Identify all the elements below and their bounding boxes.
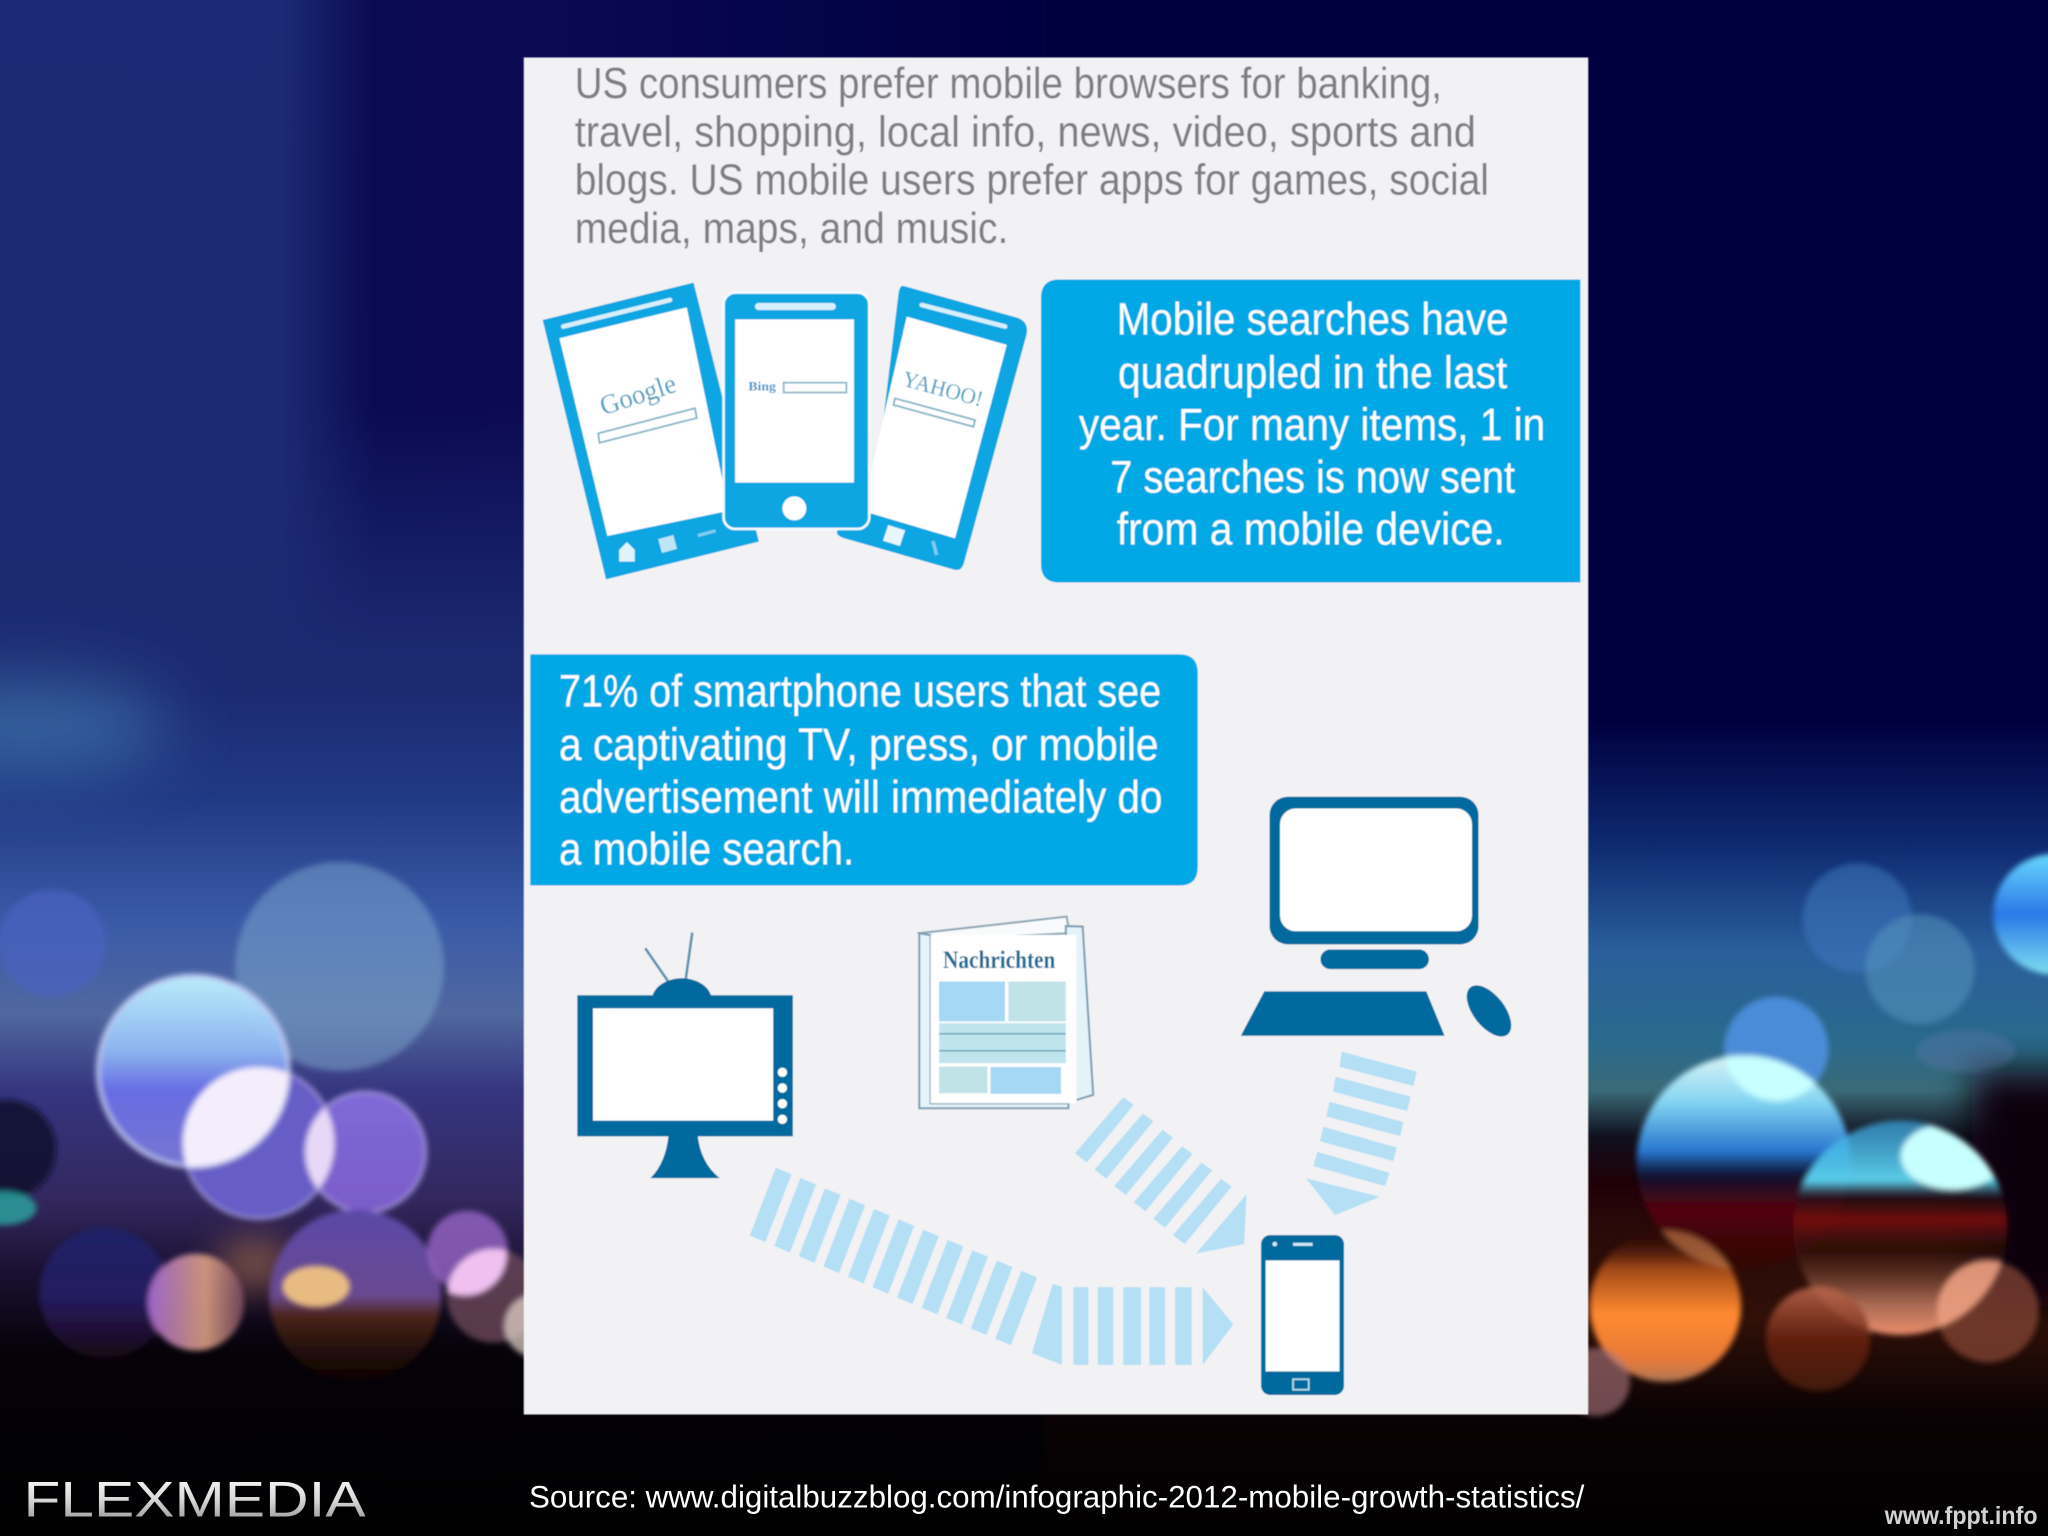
intro text: blogs. US mobile users prefer apps for games, social	[575, 157, 1489, 205]
callout: mobile searches: Mobile searches have	[1117, 293, 1509, 344]
bokeh: left cluster	[0, 862, 567, 1382]
icon: book	[658, 535, 677, 553]
icon: house	[619, 542, 635, 562]
callout: mobile searches: from a mobile device.	[1117, 504, 1505, 555]
callout: 71% of smartphone users: a mobile search.	[559, 824, 854, 875]
icon: left phone with Google: Google	[596, 368, 680, 421]
icon: television	[577, 933, 793, 1178]
icon: left phone with Google	[543, 283, 759, 579]
intro text: media, maps, and music.	[575, 205, 1008, 253]
intro text: travel, shopping, local info, news, video, sports and	[575, 108, 1476, 156]
icon: right phone with Yahoo: YAHOO!	[900, 366, 986, 411]
callout: 71% of smartphone users: 71% of smartphone users that see	[559, 666, 1161, 717]
callout: mobile searches: quadrupled in the last	[1118, 347, 1508, 398]
callout: mobile searches	[1041, 280, 1580, 583]
icon: right phone with Yahoo	[837, 286, 1027, 570]
icon: desktop computer	[1241, 797, 1520, 1044]
icon: centre phone with Bing	[724, 293, 869, 529]
intro text: US consumers prefer mobile browsers for banking,	[575, 60, 1442, 108]
intro text	[575, 60, 1489, 253]
icon: newspaper	[919, 917, 1093, 1108]
arrow: newspaper to phone	[1075, 1097, 1247, 1253]
icon: three smartphones with search engines	[543, 283, 1027, 579]
panel: infographic	[524, 57, 1588, 1415]
icon: smartphone target	[1261, 1235, 1344, 1395]
callout: 71% of smartphone users: advertisement will immediately do	[559, 771, 1162, 822]
arrow: TV to phone	[750, 1168, 1233, 1365]
arrow: computer to phone	[1306, 1052, 1417, 1215]
callout: 71% of smartphone users	[530, 654, 1198, 886]
callout: 71% of smartphone users: a captivating TV, press, or mobile	[559, 719, 1159, 770]
icon: centre phone with Bing: Bing	[748, 379, 776, 394]
callout: mobile searches: year. For many items, 1 in	[1079, 399, 1545, 450]
icon: windows logo	[883, 525, 905, 546]
source line: Source: www.digitalbuzzblog.com/infographic-2012-mobile-growth-statistics/	[529, 1479, 1585, 1514]
icon: newspaper: Nachrichten	[943, 947, 1056, 974]
credit: fppt: www.fppt.info	[1884, 1503, 2038, 1530]
bokeh: right cluster	[1562, 854, 2048, 1416]
logo: FLEXMEDIA: FLEXMEDIA	[24, 1471, 366, 1527]
callout: mobile searches: 7 searches is now sent	[1110, 451, 1515, 502]
